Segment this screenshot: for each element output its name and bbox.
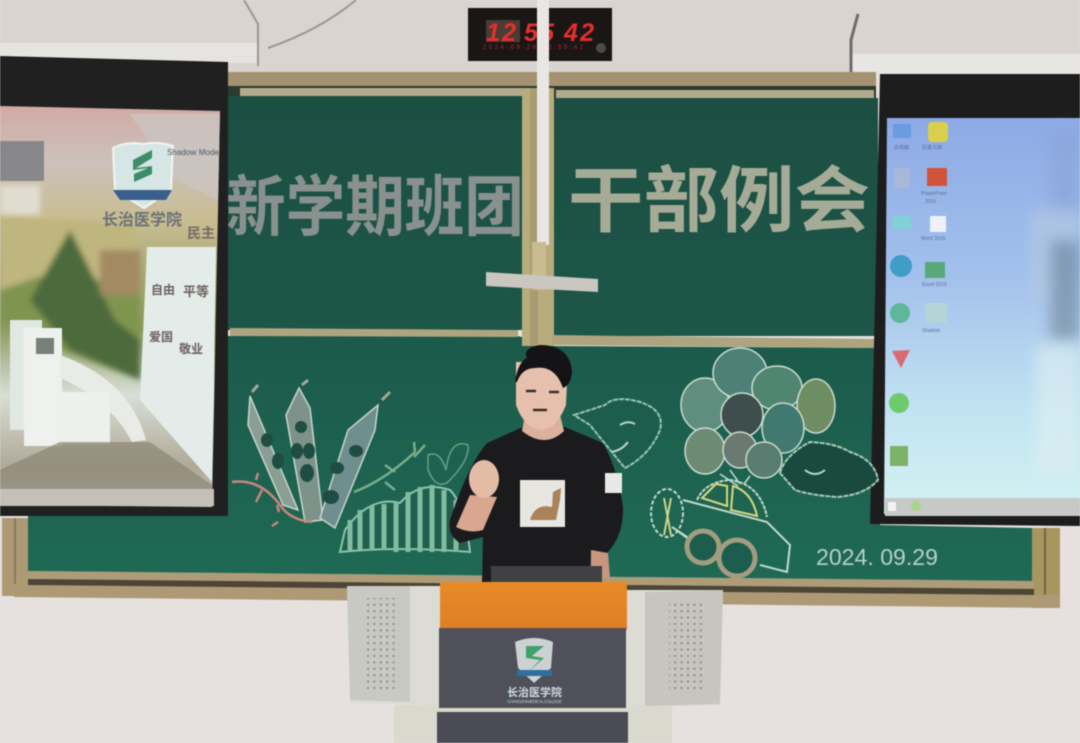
lectern crest (515, 638, 553, 683)
chalk drawing: rocket plants (248, 380, 390, 528)
photo: trees (0, 185, 140, 380)
chalk date: 2024. 09.29 (816, 544, 938, 570)
taskbar (885, 498, 1080, 516)
photo: gate (0, 320, 214, 506)
title: left half: 新学期班团 (226, 170, 524, 244)
board rails (230, 88, 874, 348)
right wrist (591, 550, 610, 578)
face (516, 362, 568, 430)
screen slogans: 敬业 (179, 341, 203, 356)
icon labels: 石墨文档 (922, 144, 942, 151)
photo: white building (140, 247, 216, 482)
chalk drawing: flying car (651, 480, 790, 576)
forearm and fist (456, 460, 499, 531)
lectern base (394, 705, 672, 743)
deer picture on shirt (520, 480, 565, 527)
sleeve badge (605, 473, 622, 493)
left projection screen (0, 56, 228, 516)
screen slogans: 自由 (151, 282, 175, 297)
screen text: college name: 长治医学院 (102, 210, 182, 229)
digital clock: 2024-09-29 12:55:42 (483, 45, 584, 51)
screen label: shadow mode: Shadow Mode (167, 148, 220, 157)
icon labels: 此电脑 (894, 144, 909, 151)
neck (522, 415, 564, 440)
screen slogans: 平等 (183, 284, 209, 299)
desktop wallpaper building (1030, 130, 1080, 475)
chalkboard upper right (552, 98, 878, 336)
hair (515, 345, 572, 388)
digital clock: 42 (563, 19, 594, 47)
digital clock (468, 8, 612, 61)
teacher (449, 345, 623, 582)
chalkboard upper left (226, 96, 524, 330)
right speaker wing (626, 590, 723, 707)
orange top (440, 582, 627, 630)
photo: distant tower (0, 141, 44, 181)
taskbar start icons (888, 501, 921, 511)
chalkboard frame (2, 72, 1060, 608)
digital clock: 55 (524, 19, 555, 47)
title: right half: 干部例会 (568, 162, 870, 242)
mouth and eyes (526, 391, 559, 410)
chalk drawing: balloon bunch (681, 348, 835, 486)
left speaker wing (347, 586, 440, 705)
icon labels (894, 144, 947, 334)
lower panel (437, 712, 628, 743)
icon labels: Excel 2016 (922, 282, 947, 288)
icon labels: PowerPoint (921, 191, 947, 197)
projector pole (486, 0, 598, 292)
chalk drawing: smiling cloud right (780, 442, 878, 497)
sweater (449, 427, 623, 582)
desktop icons (889, 122, 948, 466)
lectern (347, 582, 723, 743)
lectern english name: CHANGZHI MEDICAL COLLEGE (507, 699, 562, 704)
screen slogans (149, 225, 215, 356)
chalkboard lower (28, 336, 1032, 581)
screen slogans: 民主 (187, 225, 215, 241)
icon labels: Word 2016 (921, 236, 946, 242)
laptop on lectern (491, 566, 602, 582)
icon labels: 2016 (925, 199, 936, 205)
lectern college name: 长治医学院 (507, 685, 562, 699)
digital clock: 12 (486, 19, 516, 47)
chalk drawing: smiling cloud (574, 399, 661, 468)
chalk drawing: green branch (354, 442, 425, 492)
chalk drawing: striped hills (340, 444, 470, 552)
chalk drawing: pink branch (232, 473, 312, 526)
right projection screen (870, 74, 1080, 526)
screen slogans: 爱国 (149, 330, 173, 344)
grey front panel (439, 628, 626, 708)
icon labels: Shadow (922, 328, 940, 334)
college crest (113, 143, 173, 208)
